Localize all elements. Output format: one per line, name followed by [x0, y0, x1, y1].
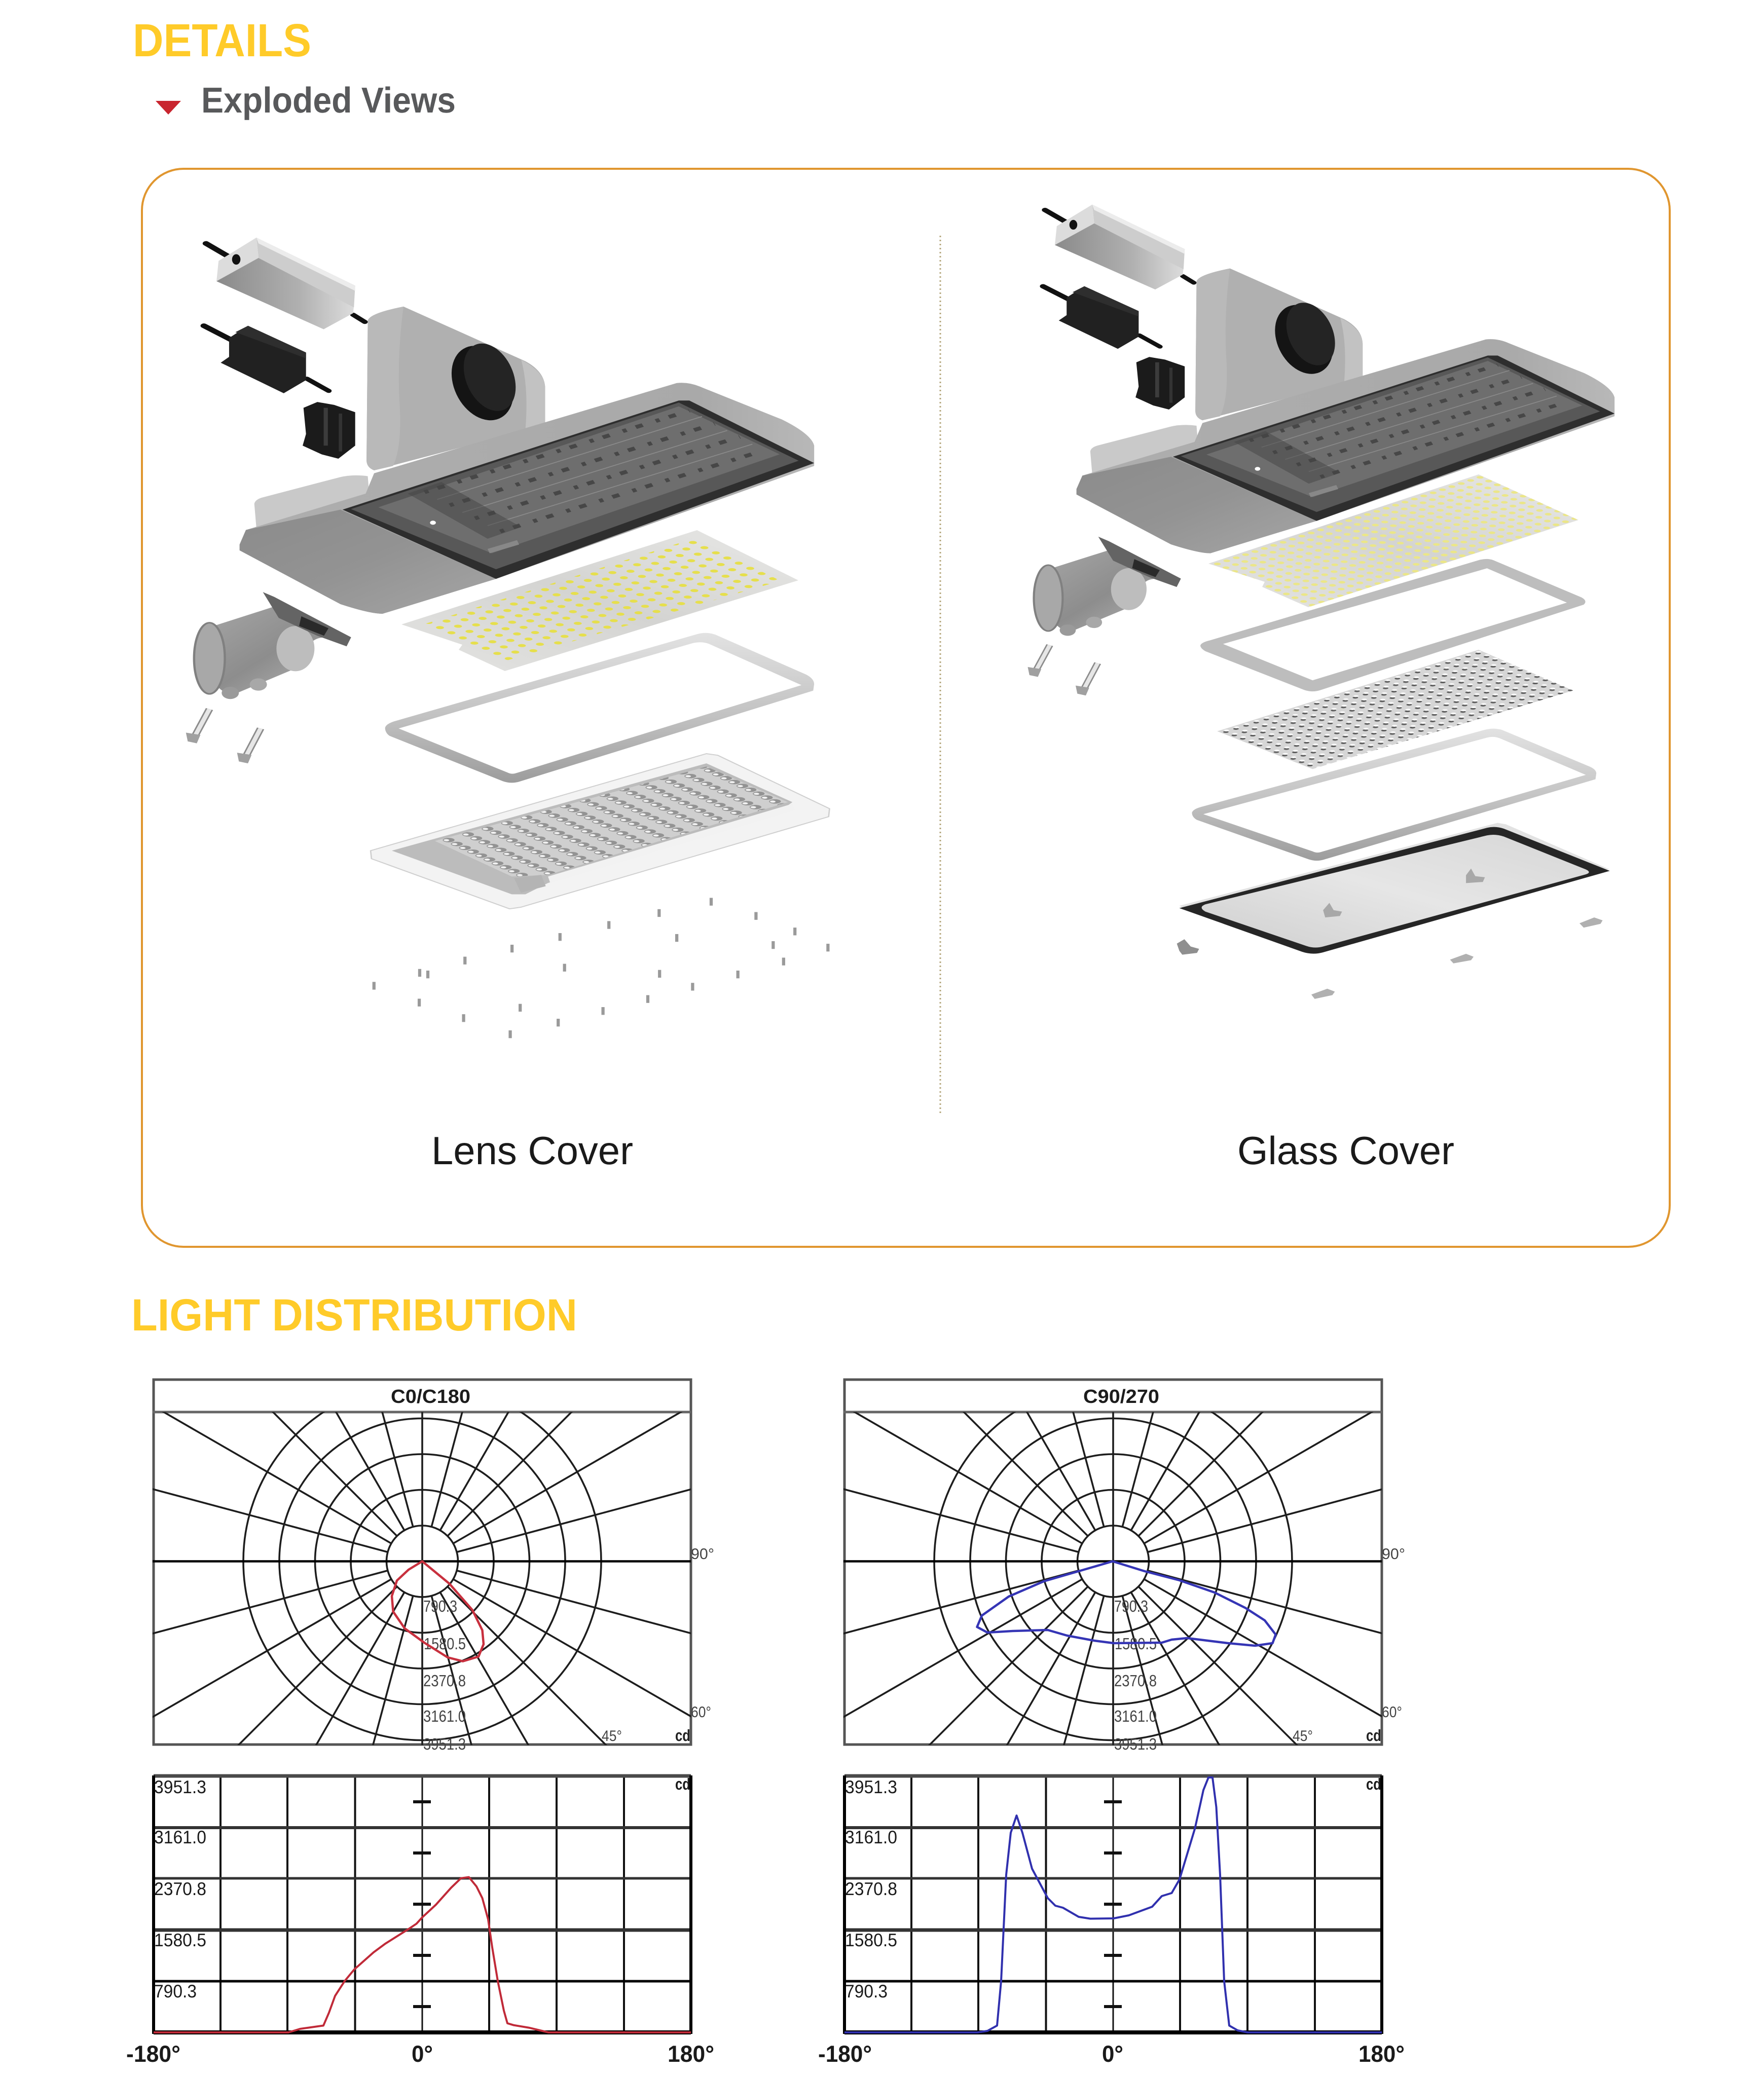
- value labels: cd: [1366, 1775, 1381, 1793]
- value labels: 3161.0: [154, 1827, 206, 1847]
- intensity labels: 1580.5: [1115, 1635, 1157, 1653]
- mounting bolts: [186, 709, 261, 763]
- intensity labels: 90°: [691, 1546, 714, 1563]
- intensity labels: 1580.5: [424, 1635, 466, 1653]
- mounting bracket with tube: [194, 592, 351, 699]
- mounting bracket, glass version: [1034, 537, 1181, 636]
- black control box: [204, 326, 328, 393]
- chart: polar distribution C90/270: [673, 1121, 1554, 2002]
- value labels: [154, 1775, 690, 2001]
- value labels: 2370.8: [154, 1878, 206, 1899]
- glass cover clips: [1177, 917, 1603, 999]
- illustration: luminaire body assembly, glass cover view: [1043, 205, 1614, 553]
- lower housing: [240, 509, 496, 614]
- intensity labels: 3161.0: [1114, 1707, 1157, 1725]
- black connector block: [303, 402, 355, 459]
- chart: polar distribution C0/C180: [0, 1121, 863, 2002]
- mounting panel: [366, 307, 545, 470]
- intensity labels: 90°: [1382, 1546, 1405, 1563]
- lens cover screws: [373, 898, 829, 1038]
- intensity labels: 45°: [1293, 1728, 1313, 1745]
- value labels: 790.3: [845, 1981, 888, 2001]
- glass cover with black seal: [1180, 823, 1610, 954]
- value labels: 3951.3: [154, 1776, 206, 1797]
- intensity labels: 45°: [602, 1728, 622, 1745]
- gasket ring, glass version: [1192, 729, 1596, 861]
- angle axis labels: -180°: [126, 2041, 180, 2067]
- intensity labels: 2370.8: [423, 1672, 466, 1690]
- angle axis labels: 180°: [668, 2041, 714, 2067]
- intensity labels: 3951.3: [1114, 1735, 1157, 1753]
- gasket ring, lens version: [385, 633, 814, 783]
- blue linear curve: [844, 1777, 1382, 2032]
- angle axis labels: [126, 2041, 714, 2067]
- mounting bolts, glass version: [1027, 645, 1097, 695]
- driver box, aluminium: [206, 238, 365, 329]
- value labels: 1580.5: [845, 1930, 897, 1950]
- intensity labels: cd: [675, 1726, 690, 1745]
- intensity labels: 790.3: [423, 1597, 457, 1615]
- value labels: 3161.0: [845, 1827, 897, 1847]
- flat gasket, glass version: [1200, 559, 1586, 691]
- intensity labels: 2370.8: [1114, 1672, 1157, 1690]
- heading: LIGHT DISTRIBUTION: LIGHT DISTRIBUTION: [131, 1289, 577, 1340]
- LED board, lens version: [401, 530, 798, 671]
- housing rear piece: [254, 475, 370, 529]
- value labels: 2370.8: [845, 1878, 897, 1899]
- intensity labels: 790.3: [1114, 1597, 1148, 1615]
- value labels: cd: [675, 1775, 690, 1793]
- value labels: [845, 1775, 1381, 2001]
- intensity labels: 60°: [691, 1704, 711, 1721]
- angle axis labels: [818, 2041, 1405, 2067]
- chart title C90/270: C90/270: [1083, 1386, 1159, 1407]
- angle axis labels: -180°: [818, 2041, 872, 2067]
- icon: red triangle marker: [156, 101, 181, 115]
- intensity labels: [1114, 1546, 1405, 1753]
- LED board, glass version: [1208, 474, 1578, 607]
- illustration: luminaire body assembly, lens cover view: [204, 238, 814, 614]
- lens cover: [371, 754, 829, 909]
- heading: DETAILS: DETAILS: [133, 15, 311, 66]
- chart: linear distribution, C90/270: [818, 1775, 1405, 2067]
- black rotary knob: [443, 340, 524, 424]
- angle axis labels: 0°: [412, 2041, 433, 2067]
- blue polar curve: [977, 1561, 1276, 1646]
- dark tray with heat sink: [343, 400, 814, 579]
- panel: exploded views frame: [142, 169, 1670, 1247]
- intensity labels: 3951.3: [423, 1735, 466, 1753]
- angle axis labels: 0°: [1102, 2041, 1123, 2067]
- intensity labels: 3161.0: [423, 1707, 466, 1725]
- chart: linear distribution, C0/C180: [126, 1775, 714, 2067]
- angle axis labels: 180°: [1358, 2041, 1405, 2067]
- red polar curve: [392, 1561, 484, 1661]
- value labels: 3951.3: [845, 1776, 897, 1797]
- red linear curve: [154, 1877, 691, 2032]
- label: Lens Cover: Lens Cover: [431, 1128, 633, 1173]
- label: Glass Cover: Glass Cover: [1237, 1128, 1454, 1173]
- intensity labels: cd: [1366, 1726, 1381, 1745]
- optical lens plate: [1217, 650, 1573, 769]
- value labels: 790.3: [154, 1981, 197, 2001]
- value labels: 1580.5: [154, 1930, 206, 1950]
- housing frame: [240, 383, 814, 614]
- intensity labels: 60°: [1382, 1704, 1402, 1721]
- chart title C0/C180: C0/C180: [391, 1386, 470, 1407]
- subheading: Exploded Views: Exploded Views: [201, 81, 456, 121]
- intensity labels: [423, 1546, 714, 1753]
